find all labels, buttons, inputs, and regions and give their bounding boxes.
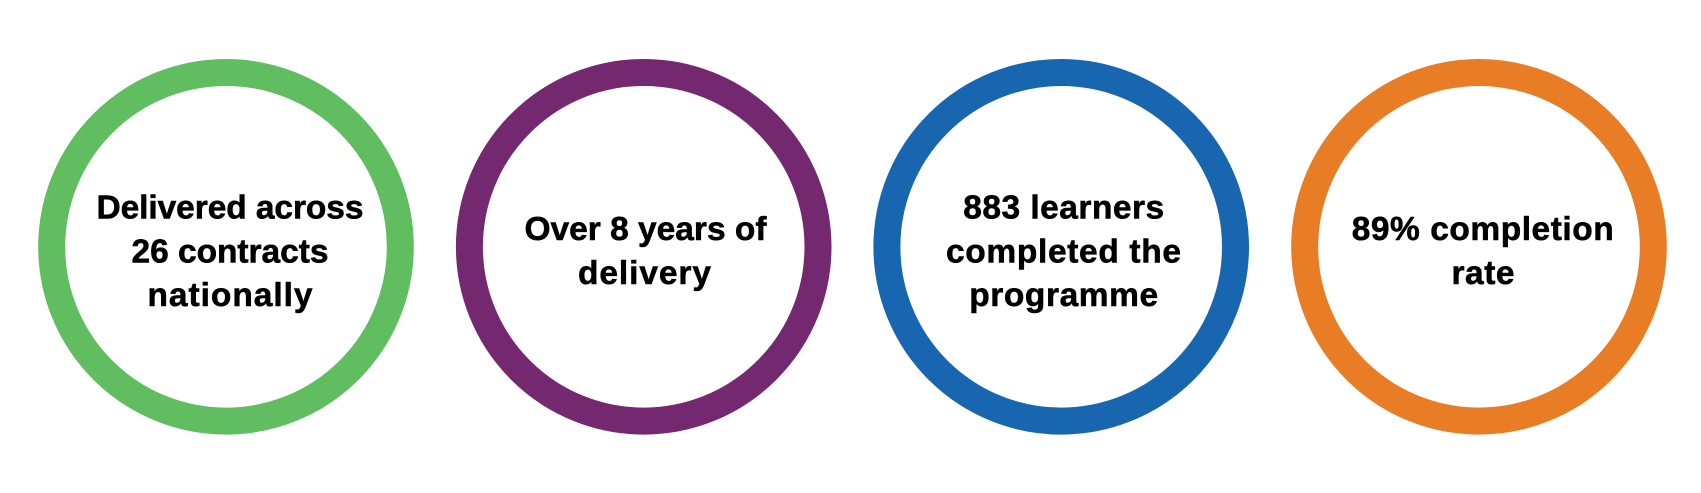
text: delivered across 26 contracts nationally: 26 contracts xyxy=(132,233,328,270)
text: 883 learners completed the programme xyxy=(946,189,1181,314)
text: delivered across 26 contracts nationally: nationally xyxy=(148,277,313,314)
panel: learners statistic xyxy=(887,72,1236,421)
orange ring xyxy=(1305,72,1653,421)
text: 883 learners completed the programme: completed the xyxy=(946,233,1181,270)
text: delivered across 26 contracts nationally xyxy=(96,189,364,314)
text: 89% completion rate: rate xyxy=(1452,255,1514,292)
panel: completion rate statistic xyxy=(1305,72,1653,421)
text: 883 learners completed the programme: programme xyxy=(969,277,1158,314)
panel: years of delivery statistic xyxy=(469,72,818,421)
text: 89% completion rate xyxy=(1352,211,1614,292)
text: over 8 years of delivery: delivery xyxy=(578,255,711,292)
text: over 8 years of delivery xyxy=(524,211,767,292)
purple ring xyxy=(469,72,818,421)
text: 883 learners completed the programme: 883 learners xyxy=(963,189,1164,226)
text: delivered across 26 contracts nationally: Delivered across xyxy=(96,189,364,226)
green ring xyxy=(52,72,400,421)
blue ring xyxy=(887,72,1236,421)
panel: contracts statistic xyxy=(52,72,400,421)
text: 89% completion rate: 89% completion xyxy=(1352,211,1614,248)
text: over 8 years of delivery: Over 8 years of xyxy=(524,211,767,248)
